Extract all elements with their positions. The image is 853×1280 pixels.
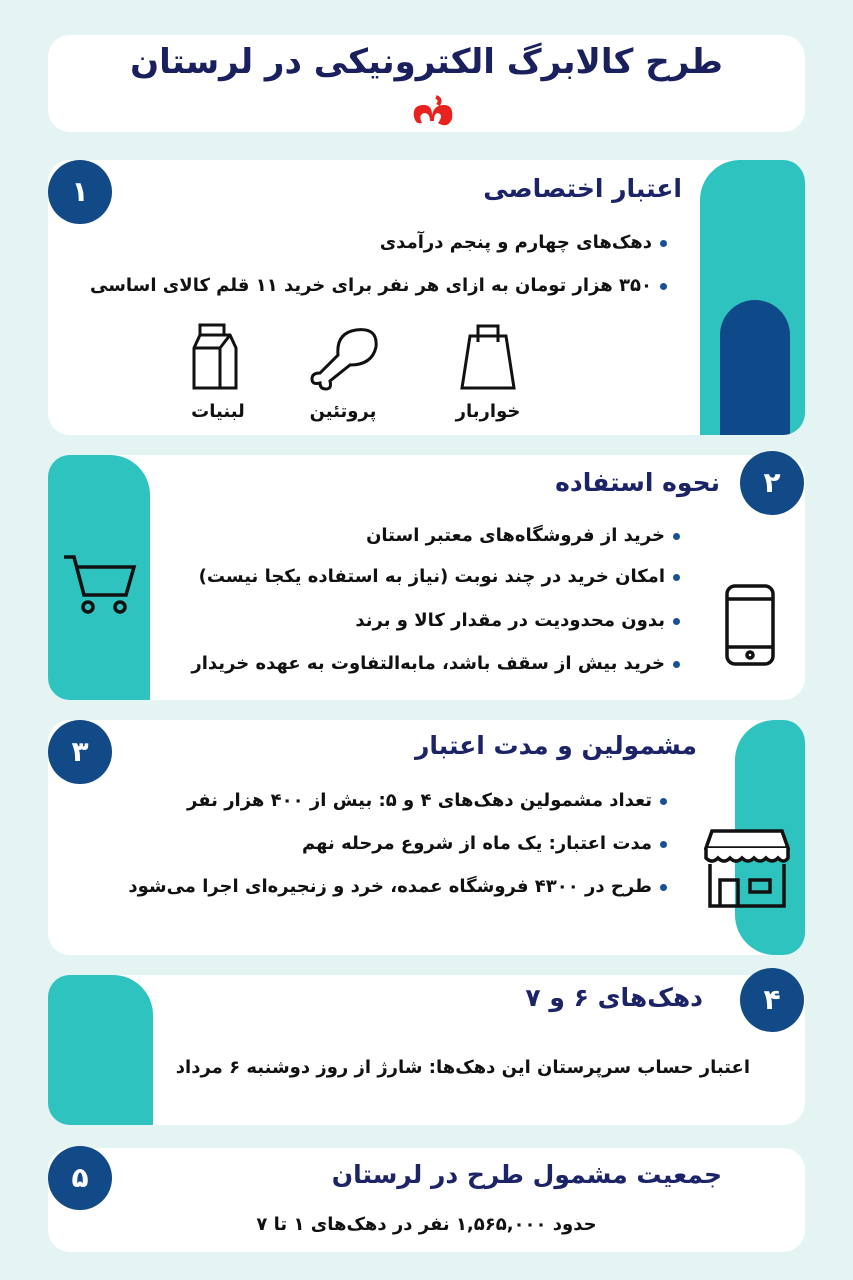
panel 4 xyxy=(48,975,805,1125)
panel 3 xyxy=(48,720,805,955)
teal band xyxy=(700,160,805,435)
panel 3: طرح در ۴۳۰۰ فروشگاه عمده، خرد و زنجیره‌ای اجرا می‌شود xyxy=(128,876,652,897)
number 5 circle xyxy=(48,1146,112,1210)
heading: نحوه استفاده xyxy=(555,468,720,497)
number 2 circle: ۲ xyxy=(763,466,781,499)
number 1 circle xyxy=(48,160,112,224)
icon: logo xyxy=(414,95,452,126)
heading: جمعیت مشمول طرح در لرستان xyxy=(332,1160,722,1189)
text: اعتبار حساب سرپرستان این دهک‌ها: شارژ از روز دوشنبه ۶ مرداد xyxy=(176,1057,750,1078)
number 3 circle xyxy=(48,720,112,784)
icon: cart xyxy=(64,555,136,614)
number 4 circle xyxy=(740,968,804,1032)
panel 1: پروتئین xyxy=(310,401,376,422)
teal band xyxy=(735,720,805,955)
dark arch xyxy=(720,300,790,435)
number 4 circle: ۴ xyxy=(763,983,781,1016)
number 5 circle: ۵ xyxy=(71,1161,89,1194)
panel 2: خرید بیش از سقف باشد، مابه‌التفاوت به عهده خریدار xyxy=(191,653,665,674)
icon: bag xyxy=(460,324,516,390)
bullets: تعداد مشمولین دهک‌های ۴ و ۵: بیش از ۴۰۰ هزار نفر xyxy=(187,790,652,811)
heading: اعتبار اختصاصی xyxy=(483,174,682,203)
panel 2: بدون محدودیت در مقدار کالا و برند xyxy=(355,610,665,631)
teal band xyxy=(48,975,153,1125)
heading: مشمولین و مدت اعتبار xyxy=(415,731,697,760)
panel 1: ۳۵۰ هزار تومان به ازای هر نفر برای خرید ۱۱ قلم کالای اساسی xyxy=(90,275,652,296)
number 3 circle: ۳ xyxy=(71,735,89,768)
icon: store xyxy=(704,829,790,908)
panel 5 xyxy=(48,1148,805,1252)
bullets: خرید از فروشگاه‌های معتبر استان xyxy=(366,525,665,546)
icon: milk xyxy=(192,324,238,390)
labels: لبنیات xyxy=(191,401,245,422)
panel 2: امکان خرید در چند نوبت (نیاز به استفاده یکجا نیست) xyxy=(199,566,665,587)
icon: phone xyxy=(725,584,775,666)
title card xyxy=(48,35,805,132)
icon: chicken xyxy=(310,328,378,390)
number 2 circle xyxy=(740,451,804,515)
title: طرح کالابرگ الکترونیکی در لرستان xyxy=(130,42,723,82)
heading: دهک‌های ۶ و ۷ xyxy=(525,983,703,1012)
bullets: دهک‌های چهارم و پنجم درآمدی xyxy=(380,232,652,253)
teal band xyxy=(48,455,150,700)
panel 1: خواربار xyxy=(456,401,520,422)
panel 3: مدت اعتبار: یک ماه از شروع مرحله نهم xyxy=(302,833,652,854)
panel 2 xyxy=(48,455,805,700)
text: حدود ۱,۵۶۵,۰۰۰ نفر در دهک‌های ۱ تا ۷ xyxy=(256,1214,597,1235)
panel 1 xyxy=(48,160,805,435)
number 1 circle: ۱ xyxy=(71,175,89,208)
